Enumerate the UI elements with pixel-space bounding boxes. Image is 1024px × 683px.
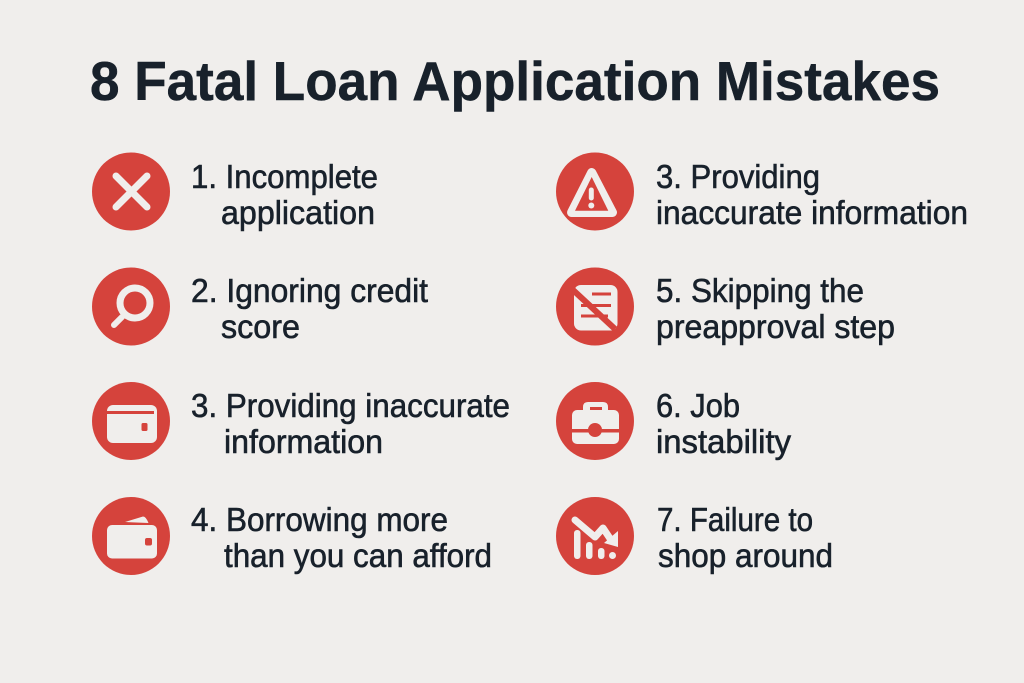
label: skipping the preapproval step: preapproval step (656, 308, 895, 345)
label: ignoring credit score: 2. Ignoring credit (191, 272, 428, 309)
label: incomplete application: application (221, 194, 375, 231)
label: providing inaccurate information: 3. Providing (656, 158, 820, 195)
title: 8 Fatal Loan Application Mistakes (90, 50, 940, 112)
label: providing inaccurate information: 3. Providing inaccurate (191, 387, 510, 424)
label: providing inaccurate information (191, 387, 510, 460)
label: ignoring credit score: score (221, 308, 300, 345)
label: failure to shop around: 7. Failure to (657, 501, 813, 538)
label: incomplete application (191, 158, 378, 231)
icon: falling bar chart (556, 497, 634, 575)
icon: crossed-out document (556, 268, 634, 346)
label: skipping the preapproval step (656, 272, 895, 345)
item 1: incomplete application (92, 152, 378, 231)
label: job instability: 6. Job (656, 387, 740, 424)
label: borrowing more than you can afford: than you can afford (224, 537, 492, 574)
item 7: job instability (556, 382, 791, 460)
label: job instability: instability (656, 423, 791, 460)
label: job instability (656, 387, 791, 460)
label: providing inaccurate information: information (224, 423, 383, 460)
label: borrowing more than you can afford: 4. Borrowing more (191, 501, 448, 538)
label: skipping the preapproval step: 5. Skipping the (656, 272, 864, 309)
icon: warning triangle (556, 152, 634, 230)
item 8: failure to shop around (556, 497, 833, 575)
item 5: providing inaccurate information (right column) (556, 152, 968, 231)
label: borrowing more than you can afford (191, 501, 492, 574)
label: failure to shop around: shop around (658, 537, 833, 574)
label: providing inaccurate information (656, 158, 968, 231)
label: incomplete application: 1. Incomplete (191, 158, 378, 195)
icon: card wallet (92, 382, 170, 460)
item 4: borrowing more than you can afford (92, 497, 492, 575)
icon: briefcase (556, 382, 634, 460)
icon: X mark (92, 152, 170, 230)
item 2: ignoring credit score (92, 268, 428, 346)
label: providing inaccurate information: inaccurate information (656, 194, 968, 231)
label: failure to shop around (657, 501, 833, 574)
label: ignoring credit score (191, 272, 428, 345)
item 6: skipping the preapproval step (556, 268, 895, 346)
icon: wallet with flap (92, 497, 170, 575)
icon: magnifying glass (92, 268, 170, 346)
item 3: providing inaccurate information (92, 382, 510, 460)
